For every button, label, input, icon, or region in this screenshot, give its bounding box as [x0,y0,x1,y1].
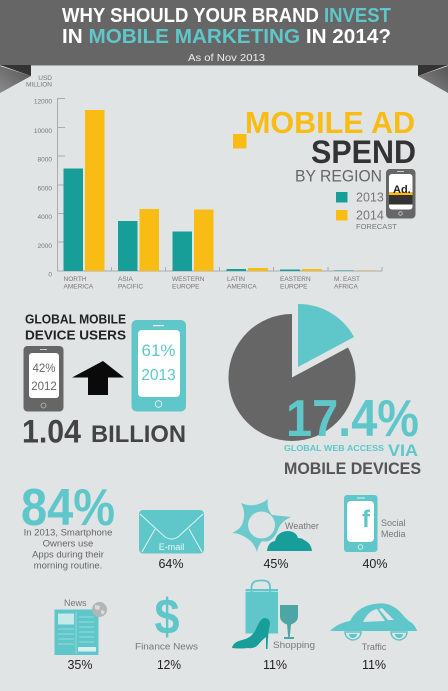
region labels: WESTERN [172,276,205,283]
region labels: EUROPE [172,284,200,290]
title [62,5,391,48]
value: weather: 45% [263,557,289,571]
y-axis labels: USD [38,75,52,82]
value: social media: 40% [362,557,388,571]
bar chart [26,75,382,290]
title: IN MOBILE MARKETING IN 2014? [62,26,391,48]
title: WHY SHOULD YOUR BRAND INVEST [62,5,391,27]
date note: As of Nov 2013 [188,52,265,64]
yellow square accent [233,134,246,148]
region labels: EUROPE [280,284,308,290]
statistic: 84%: Apps during their [32,550,104,560]
heading: mobile ad spend: BY REGION [295,166,382,186]
region labels: M. EAST [334,276,360,283]
value: traffic: 11% [362,658,386,672]
label: social media [381,518,406,539]
icon: social media phone: f [362,506,371,533]
legend: 2013 [356,190,384,204]
icon: phone 2013: 61% [141,341,176,360]
label: social media: Social [381,518,406,528]
statistic: 84%: Owners use [43,538,93,550]
icon: ad phone: Ad. [393,184,411,196]
icon: car [330,603,417,640]
icon: dollar sign: $ [154,589,180,645]
value: shopping: 11% [263,658,287,672]
icon: email: E-mail [159,542,184,552]
y-axis labels: 2000 [38,243,52,250]
heading: global mobile device users: DEVICE USERS [25,328,126,342]
legend [336,190,397,231]
y-axis labels: 8000 [38,156,52,164]
value: email: 64% [158,557,184,571]
heading: global mobile device users: GLOBAL MOBILE [25,312,126,326]
bars: 2014 forecast [85,110,376,271]
value: news: 35% [67,658,93,672]
statistic: 1.04 billion [22,414,186,450]
heading: mobile ad spend: SPEND [311,134,416,170]
y-axis labels: 6000 [38,186,52,192]
statistic: 17.4%: MOBILE DEVICES [284,460,421,478]
icon: phone 2012: 42% [32,363,56,375]
y-axis labels: 10000 [34,128,52,135]
region labels: AMERICA [227,284,257,290]
statistic: 17.4% [284,390,421,478]
region labels: AFRICA [334,284,358,290]
icon: phone 2012: 2012 [31,381,57,393]
y-axis labels: 4000 [38,214,52,221]
statistic: 17.4%: VIA [388,441,418,460]
region labels: AMERICA [64,284,94,290]
y-axis labels [26,75,52,278]
statistic: 84%: In 2013, Smartphone [24,528,112,538]
legend: 2014 [356,208,384,222]
icon: social media phone [344,495,378,552]
header banner [0,0,448,93]
region labels: PACIFIC [118,284,143,290]
region labels [64,276,360,290]
bars: 2013 [64,168,354,271]
region labels: NORTH [64,276,87,283]
icon: news: News [64,598,87,608]
pie chart [228,304,356,441]
arrow: growth [72,361,124,395]
icon: weather [232,499,319,552]
region labels: ASIA [118,276,133,283]
y-axis labels: 0 [48,272,52,278]
icon: shopping bag, glass and heel [232,580,315,650]
region labels: EASTERN [280,276,311,283]
statistic: 17.4%: GLOBAL WEB ACCESS [284,443,384,453]
value: finance news: 12% [157,658,181,672]
icon: shopping bag, glass and heel: Shopping [273,640,315,650]
statistic: 84%: 84% [21,479,115,537]
icon: phone 2013: 2013 [141,367,176,384]
statistic: 17.4%: 17.4% [286,390,419,448]
region labels: LATIN [227,276,245,283]
statistic: 84% [21,479,115,572]
icon: phone 2012 [24,346,64,412]
icon: email [139,510,204,554]
label: finance news: Finance News [135,642,199,652]
statistic: 84%: morning routine. [34,560,102,572]
icon: news [54,598,107,655]
label: social media: Media [381,529,406,539]
y-axis labels: MILLION [26,82,52,88]
statistic: 1.04 billion: 1.04 [22,414,81,450]
y-axis labels: 12000 [34,98,52,106]
icon: phone 2013 [132,320,186,412]
icon: ad phone [386,169,416,218]
statistic: 1.04 billion: BILLION [91,421,186,448]
icon: weather: Weather [285,521,319,531]
chart axes [58,98,382,271]
heading: mobile ad spend [233,105,416,186]
heading: global mobile device users [25,312,126,342]
legend: FORECAST [356,222,397,231]
heading: mobile ad spend: MOBILE AD [245,105,415,140]
label: traffic: Traffic [362,642,387,652]
